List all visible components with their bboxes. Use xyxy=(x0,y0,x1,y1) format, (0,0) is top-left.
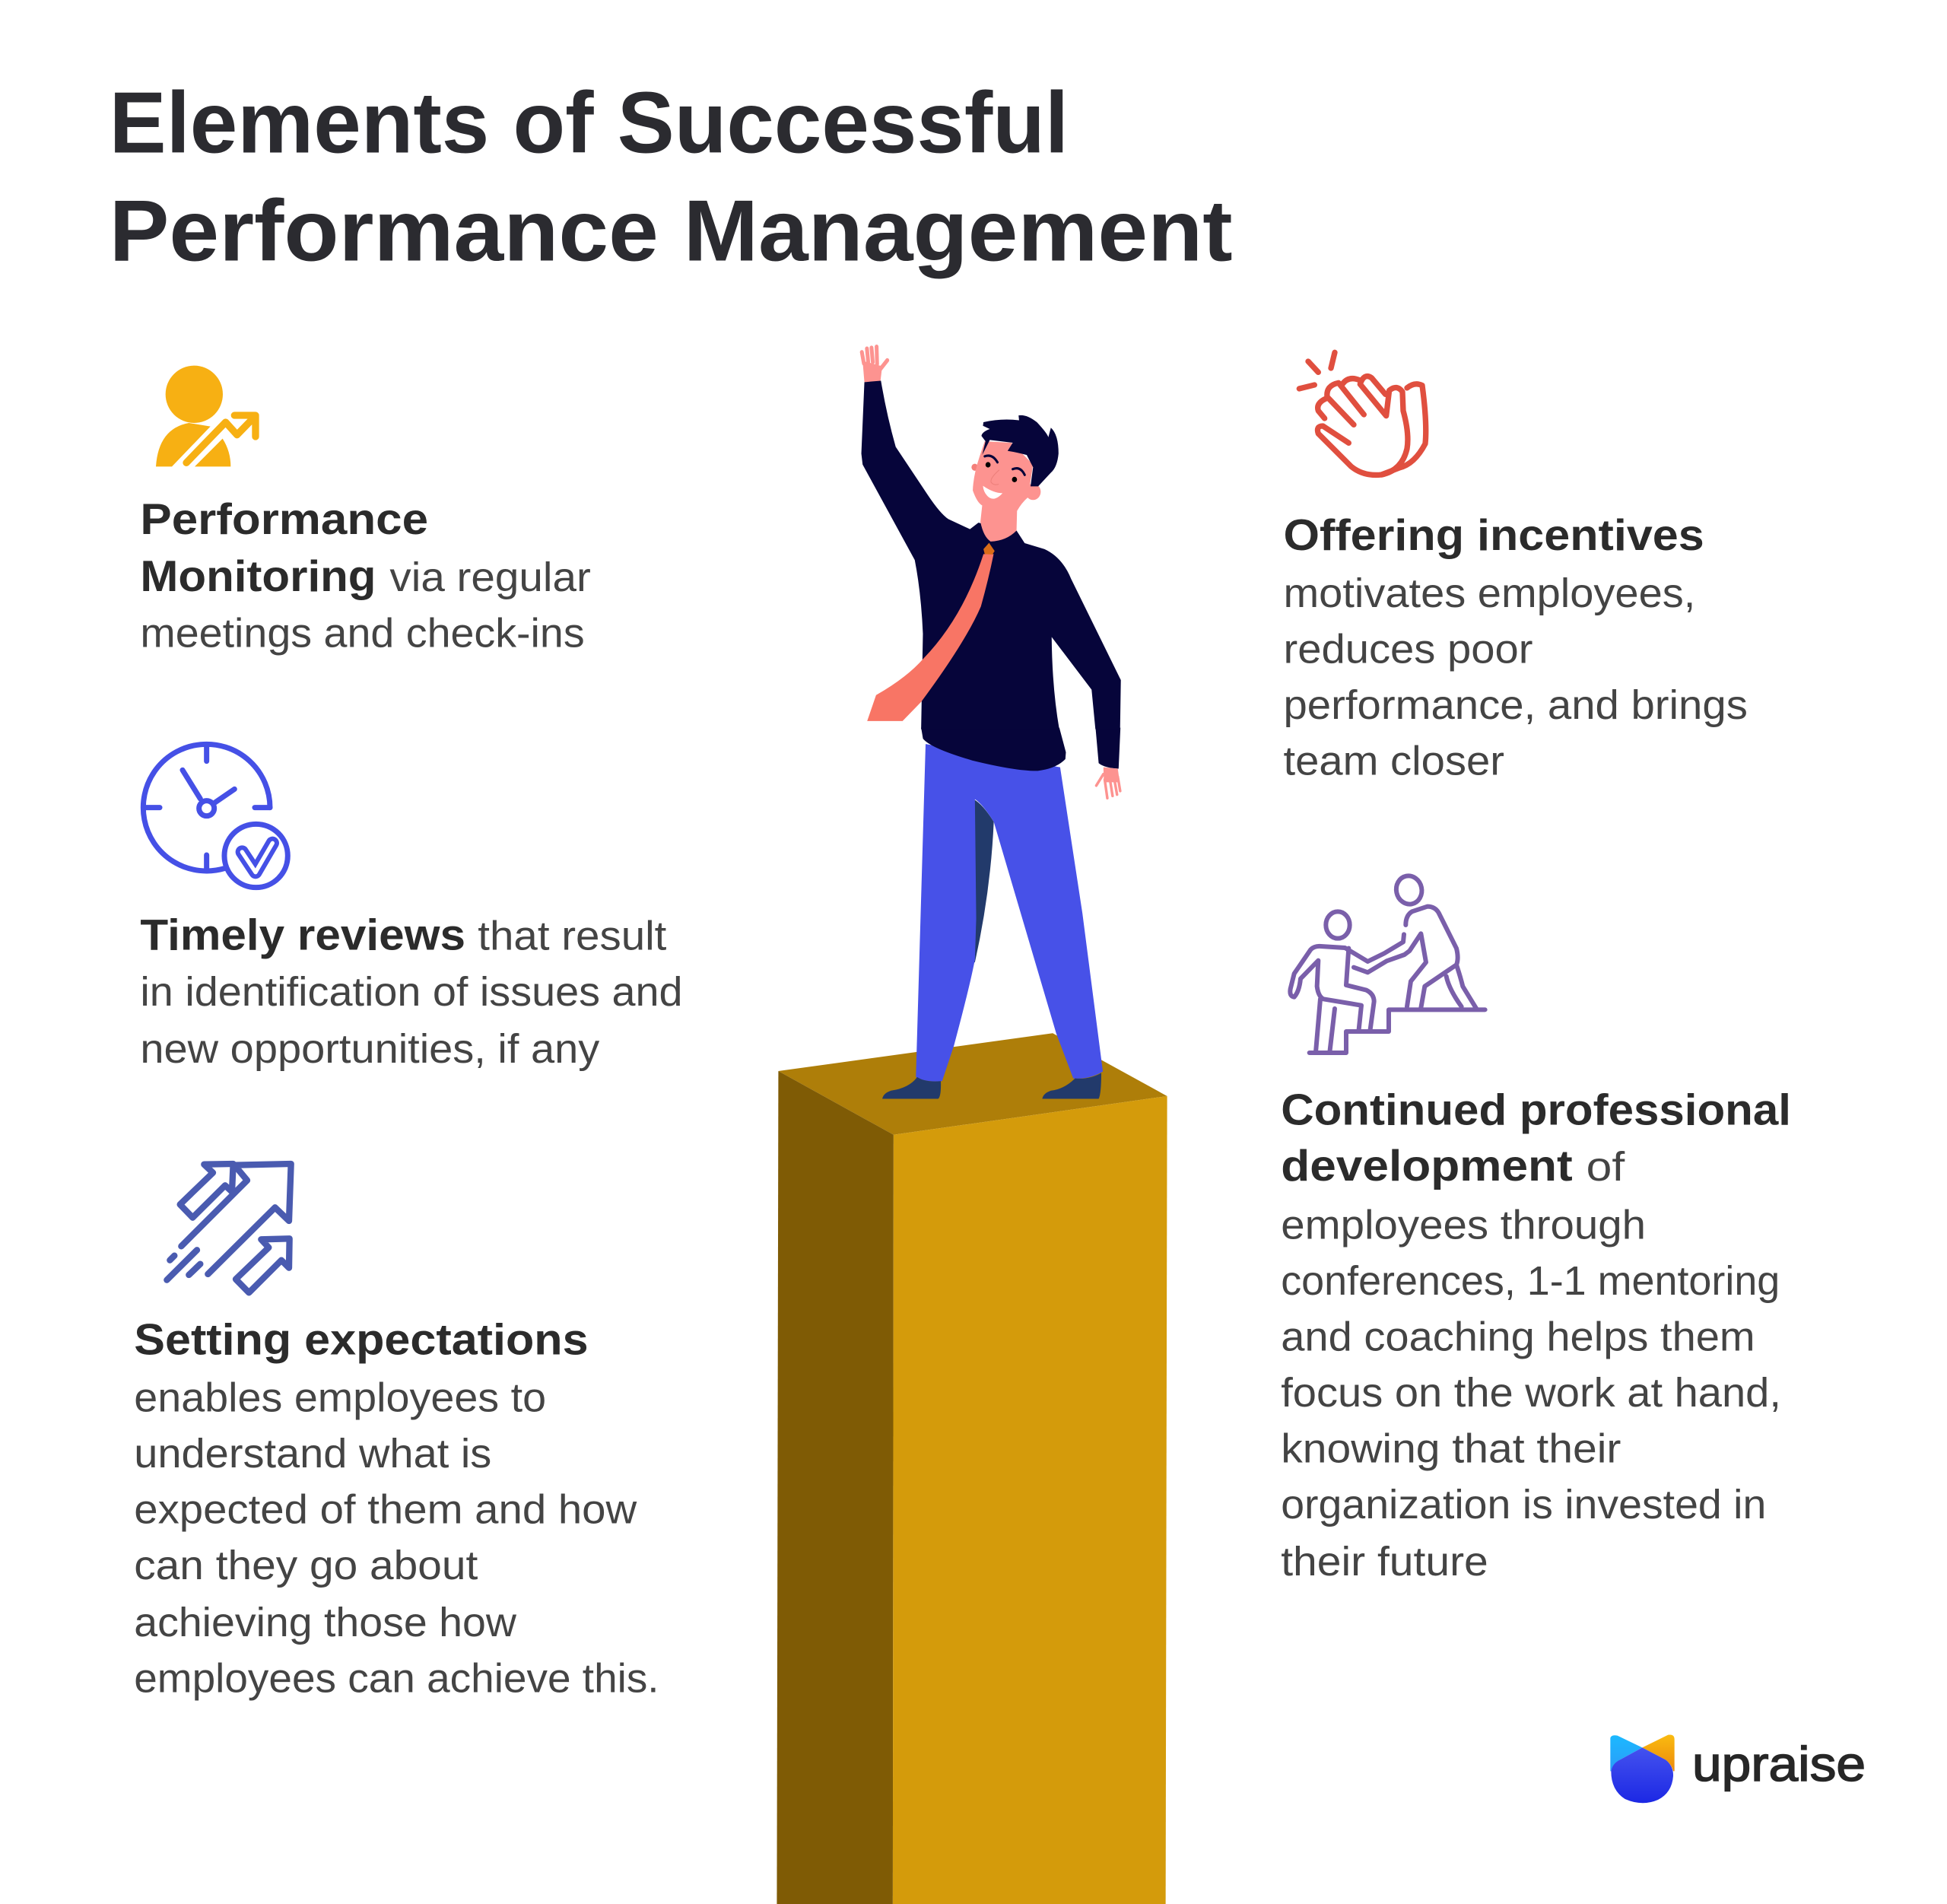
text: continued professional development: conferences, 1-1 mentoring xyxy=(1281,1258,1780,1304)
icon: person helping another up stairs xyxy=(1290,873,1485,1053)
text: continued professional development: Continued professional xyxy=(1281,1086,1791,1135)
text: continued professional development: and coaching helps them xyxy=(1281,1314,1755,1360)
text: continued professional development: of xyxy=(1587,1144,1625,1190)
text: offering incentives: motivates employees, xyxy=(1283,571,1695,616)
text: continued professional development: organization is invested in xyxy=(1281,1482,1766,1527)
text: offering incentives: team closer xyxy=(1283,738,1504,784)
text: setting expectations xyxy=(134,1316,659,1701)
text: setting expectations: can they go about xyxy=(134,1543,478,1588)
text: timely reviews: new opportunities, if any xyxy=(140,1026,599,1072)
logo mark xyxy=(1610,1734,1675,1803)
person standing on pedestal waving xyxy=(862,347,1121,1099)
pedestal xyxy=(777,1033,1167,1904)
text: continued professional development: their future xyxy=(1281,1539,1488,1585)
logo: upraise xyxy=(1610,1734,1866,1803)
legs, shoes and lowered hand xyxy=(882,728,1120,1099)
text: continued professional development xyxy=(1281,1086,1791,1585)
text: setting expectations: expected of them and how xyxy=(134,1486,637,1532)
text: continued professional development: knowing that their xyxy=(1281,1426,1621,1471)
icon: clock with check mark xyxy=(143,744,287,888)
logo wordmark: upraise xyxy=(1692,1737,1866,1791)
text: performance monitoring: via regular xyxy=(389,555,591,600)
text: performance monitoring: Performance xyxy=(140,495,428,544)
text: offering incentives: reduces poor xyxy=(1283,626,1533,672)
text: offering incentives xyxy=(1283,511,1748,784)
icon: person with rising arrow xyxy=(156,366,256,466)
torso, raised arm, tie and head xyxy=(862,347,1121,729)
text: timely reviews: Timely reviews xyxy=(140,911,465,959)
title: Elements of Successful xyxy=(110,75,1069,172)
icon: clapping hands xyxy=(1299,352,1426,475)
text: timely reviews: that result xyxy=(478,913,666,958)
text: performance monitoring xyxy=(140,495,591,656)
text: offering incentives: performance, and brings xyxy=(1283,682,1748,728)
title: Performance Management xyxy=(110,183,1233,280)
text: offering incentives: Offering incentives xyxy=(1283,511,1704,560)
text: timely reviews: in identification of issues and xyxy=(140,969,683,1015)
text: continued professional development: development xyxy=(1281,1142,1573,1190)
text: setting expectations: achieving those how xyxy=(134,1600,517,1645)
icon: upward arrows xyxy=(167,1164,291,1292)
text: setting expectations: understand what is xyxy=(134,1431,491,1476)
text: timely reviews xyxy=(140,911,683,1072)
text: setting expectations: employees can achieve this. xyxy=(134,1655,659,1701)
text: continued professional development: focus on the work at hand, xyxy=(1281,1370,1781,1416)
text: setting expectations: enables employees to xyxy=(134,1375,546,1421)
text: performance monitoring: meetings and check-ins xyxy=(140,610,585,656)
text: performance monitoring: Monitoring xyxy=(140,552,376,601)
text: continued professional development: employees through xyxy=(1281,1203,1646,1248)
text: setting expectations: Setting expectations xyxy=(134,1316,589,1365)
title xyxy=(110,75,1233,280)
